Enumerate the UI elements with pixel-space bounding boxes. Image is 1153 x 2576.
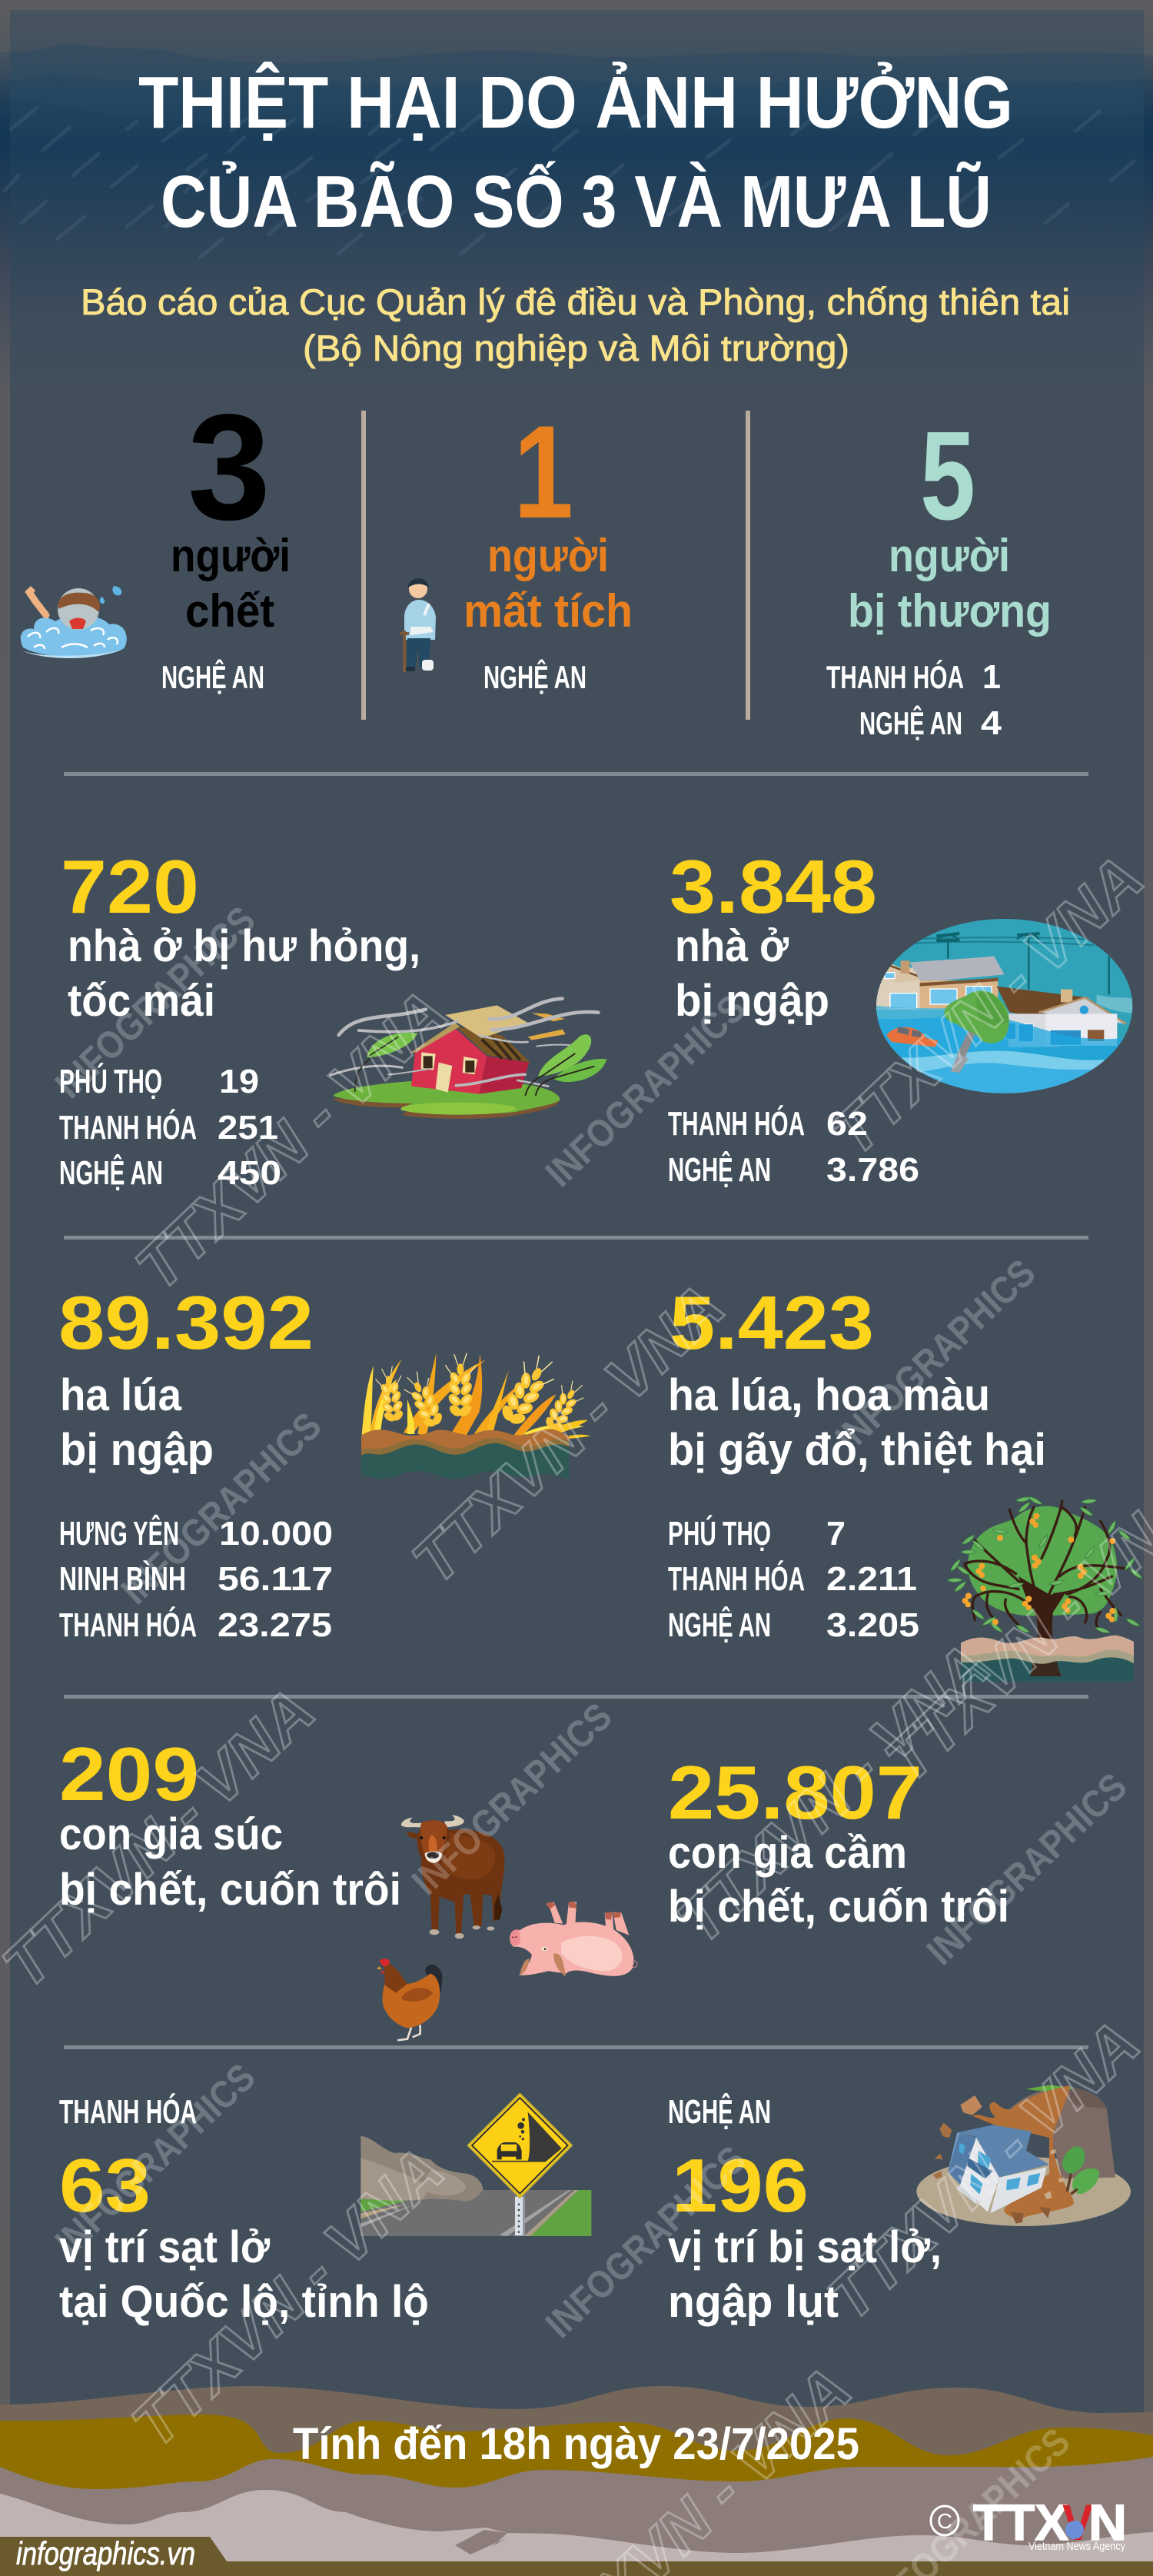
description	[668, 1828, 1009, 1932]
region table: 2.211	[826, 1560, 917, 1598]
region table	[59, 1062, 281, 1192]
subtitle	[81, 281, 1070, 368]
number: 63: 63	[59, 2143, 151, 2228]
watermarks: INFOGRAPHICS	[827, 1251, 1044, 1459]
description: vị trí sạt lở	[59, 2222, 271, 2272]
label: deaths: chết	[185, 585, 274, 637]
region table: THANH HÓA	[668, 1104, 805, 1143]
description	[675, 921, 829, 1026]
watermarks: agency outline: TTXVN - VNA	[400, 1271, 738, 1597]
label: injured: người	[889, 530, 1010, 581]
agency logo: N	[1088, 2494, 1127, 2551]
number: 5 injured: 5	[920, 405, 975, 546]
watermarks: INFOGRAPHICS	[404, 1695, 620, 1903]
title: THIỆT HẠI DO ẢNH HƯỞNG	[138, 61, 1013, 144]
watermarks: agency outline: TTXVN - VNA	[123, 977, 461, 1303]
title: CỦA BÃO SỐ 3 VÀ MƯA LŨ	[161, 160, 992, 243]
watermarks	[47, 898, 1135, 2576]
region table: 251	[218, 1109, 278, 1147]
title	[138, 61, 1013, 243]
icon: hen	[377, 1959, 443, 2040]
region table	[668, 1104, 919, 1189]
subtitle: Báo cáo của Cục Quản lý đê điều và Phòng, chống thiên tai	[81, 281, 1070, 322]
watermarks: INFOGRAPHICS	[47, 898, 264, 1107]
region: Nghe An: NGHỆ AN	[483, 658, 586, 695]
region table: THANH HÓA	[59, 1606, 197, 1644]
panel: broken crops	[668, 1280, 1142, 1682]
region table: THANH HÓA	[826, 658, 964, 695]
description: bị gãy đổ, thiệt hại	[668, 1425, 1046, 1475]
watermarks: INFOGRAPHICS	[537, 2138, 754, 2346]
region table: 10.000	[219, 1515, 333, 1553]
number: 1 missing: 1	[513, 398, 573, 546]
label: injured: bị thương	[848, 585, 1052, 637]
region table: 19	[219, 1063, 259, 1100]
watermarks: agency outline	[0, 843, 1153, 2576]
description: bị chết, cuốn trôi	[668, 1882, 1009, 1932]
description	[60, 1370, 214, 1475]
icon: flooded neighbourhood	[876, 919, 1133, 1093]
description: tại Quốc lộ, tỉnh lộ	[59, 2277, 429, 2327]
panel: injured	[826, 405, 1052, 742]
watermarks: agency outline: TTXVN - VNA	[819, 843, 1153, 1169]
panel: poultry	[668, 1750, 1009, 1932]
region table: 3.205	[826, 1606, 919, 1644]
number: 720: 720	[61, 844, 199, 929]
description	[68, 921, 420, 1026]
panel: damaged houses	[59, 844, 606, 1192]
region table: 56.117	[218, 1560, 333, 1598]
label: missing	[464, 530, 633, 637]
label: injured	[848, 530, 1052, 637]
region table	[826, 658, 1002, 742]
watermarks: agency outline: TTXVN - VNA	[665, 1631, 1003, 1957]
description	[668, 1370, 1046, 1475]
divider: left	[361, 411, 366, 720]
region label: NGHỆ AN	[668, 2092, 771, 2131]
number: 3 dead: 3	[188, 383, 271, 551]
region table: 23.275	[218, 1606, 332, 1644]
region table: 7	[826, 1515, 846, 1553]
description: ngập lụt	[668, 2277, 839, 2327]
region table: HƯNG YÊN	[59, 1514, 179, 1553]
number: 196: 196	[672, 2143, 809, 2228]
footer bands	[0, 2386, 1153, 2576]
label: missing: người	[487, 530, 609, 581]
description: ha lúa, hoa màu	[668, 1370, 990, 1420]
icon: rockfall road sign	[361, 2094, 591, 2236]
region table: THANH HÓA	[59, 1108, 197, 1147]
description: nhà ở bị hư hỏng,	[68, 921, 420, 971]
description: vị trí bị sạt lở,	[668, 2222, 942, 2272]
agency logo: TTX	[973, 2494, 1068, 2551]
watermarks: INFOGRAPHICS	[113, 1404, 330, 1612]
region: Nghe An: NGHỆ AN	[161, 658, 264, 695]
label: deaths: người	[171, 530, 291, 581]
description: con gia súc	[59, 1809, 283, 1859]
region table	[668, 1514, 919, 1644]
label: missing: mất tích	[464, 585, 633, 637]
icon: bull	[401, 1815, 504, 1939]
number: 25.807: 25.807	[668, 1750, 922, 1835]
description: con gia cầm	[668, 1828, 907, 1878]
region table: 3.786	[826, 1151, 919, 1189]
description: bị ngập	[675, 976, 829, 1026]
description: nhà ở	[675, 921, 789, 971]
agency logo: C	[937, 2509, 952, 2533]
panel: flooded houses	[668, 844, 1140, 1189]
region table: NGHỆ AN	[859, 704, 962, 741]
icon: fruit tree in flood	[947, 1493, 1142, 1682]
icon: drowning person	[21, 586, 127, 658]
region label: THANH HÓA	[59, 2092, 197, 2131]
label: deaths	[171, 530, 291, 637]
icon: injured man	[400, 578, 436, 672]
region table: 62	[826, 1105, 868, 1143]
description: ha lúa	[60, 1370, 182, 1420]
watermarks: agency outline: TTXVN - VNA	[119, 2135, 457, 2461]
number: 5.423: 5.423	[670, 1280, 874, 1365]
description	[668, 2222, 942, 2327]
panel: missing	[400, 398, 633, 695]
region table: NGHỆ AN	[59, 1153, 163, 1192]
agency logo: Vietnam News Agency	[1028, 2540, 1125, 2553]
panel: flooded rice	[58, 1280, 590, 1644]
panel: landslides Thanh Hoa	[59, 2092, 591, 2327]
panel: livestock	[59, 1732, 401, 1915]
region table: 450	[218, 1154, 281, 1192]
icon: storm-damaged house	[331, 999, 606, 1119]
icon group: animals	[377, 1815, 637, 2040]
region table: PHÚ THỌ	[59, 1062, 162, 1100]
source tag: infographics.vn	[16, 2535, 195, 2571]
number: 209: 209	[59, 1732, 199, 1816]
icon: house hit by landslide	[916, 2085, 1131, 2226]
agency logo: V	[1062, 2494, 1093, 2551]
number: 3.848: 3.848	[670, 844, 877, 929]
region table: NINH BÌNH	[59, 1559, 186, 1598]
region table	[59, 1514, 333, 1644]
panel: deaths	[21, 383, 291, 695]
icon: overturned pig	[510, 1902, 637, 1977]
number: 89.392: 89.392	[58, 1280, 314, 1365]
description	[59, 2222, 429, 2327]
region table: 4	[981, 704, 1002, 742]
divider: right	[746, 411, 750, 720]
agency logo	[931, 2494, 1127, 2553]
region table: 1	[982, 658, 1001, 696]
description: bị ngập	[60, 1425, 214, 1475]
watermarks: agency outline: TTXVN - VNA	[815, 2008, 1153, 2334]
icon: rice under water	[361, 1350, 590, 1479]
panel: landslides Nghe An	[668, 2085, 1131, 2327]
description: tốc mái	[68, 976, 215, 1026]
description	[59, 1809, 401, 1915]
region table: THANH HÓA	[668, 1559, 805, 1598]
watermarks: INFOGRAPHICS	[537, 987, 754, 1195]
region table: NGHỆ AN	[668, 1150, 771, 1189]
subtitle: (Bộ Nông nghiệp và Môi trường)	[303, 328, 849, 368]
region table: NGHỆ AN	[668, 1606, 771, 1644]
watermarks: INFOGRAPHICS	[47, 2055, 264, 2264]
description: bị chết, cuốn trôi	[59, 1865, 401, 1915]
region table: PHÚ THỌ	[668, 1514, 771, 1553]
date note: Tính đến 18h ngày 23/7/2025	[293, 2419, 859, 2469]
